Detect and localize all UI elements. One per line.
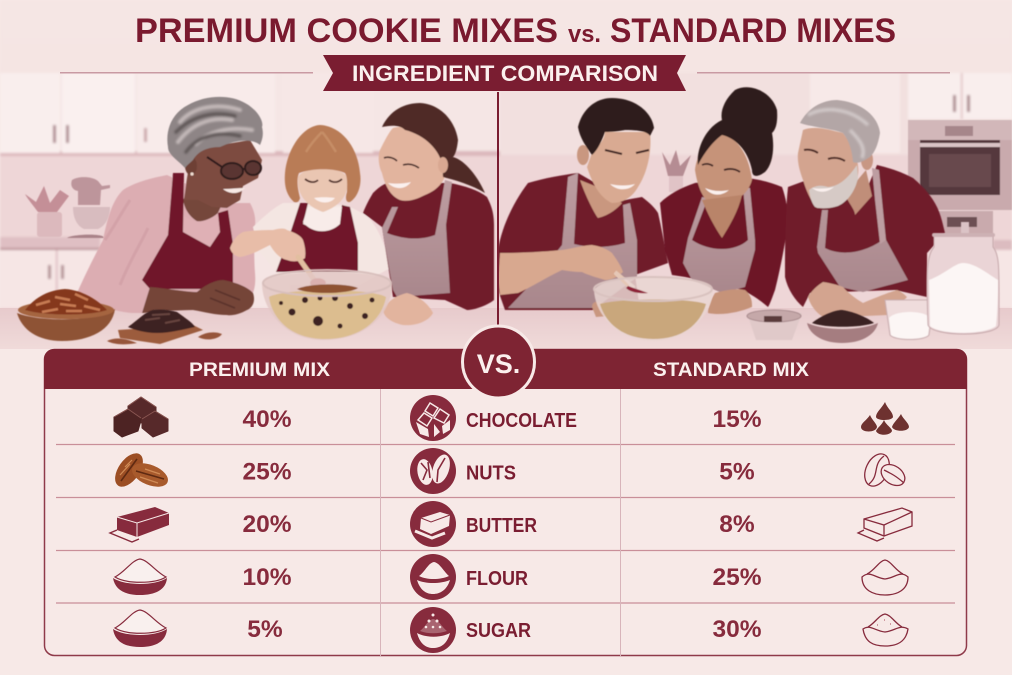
chocolate board: [107, 310, 222, 344]
title: vs.: [568, 21, 601, 48]
premium percentages: 10%: [242, 564, 292, 591]
counter ingredients: [17, 222, 999, 344]
decorative rule left: [60, 72, 313, 74]
premium percentages: 40%: [242, 406, 292, 433]
ingredient labels: NUTS: [466, 462, 516, 484]
icon: standard flour outline: [862, 560, 908, 595]
centre divider: [497, 92, 499, 332]
young man: [498, 98, 668, 317]
oven: [908, 120, 1012, 240]
premium percentages: 5%: [247, 616, 283, 643]
header: premium mix: PREMIUM MIX: [189, 359, 330, 381]
standard mixing bowl: [594, 273, 713, 341]
standard percentages: 30%: [712, 616, 762, 643]
page background below photo: [0, 349, 1012, 675]
icon: centre chocolate badge: [410, 395, 456, 441]
vs badge: [462, 326, 534, 398]
flour jar: [927, 222, 999, 334]
standard percentages: 5%: [719, 458, 755, 486]
grandmother: [77, 97, 263, 315]
stand mixer: [67, 177, 110, 238]
icon: premium flour bowl: [113, 559, 167, 595]
child: [230, 125, 390, 288]
ribbon: ingredient comparison: INGREDIENT COMPARISON: [352, 61, 658, 86]
mother: [363, 103, 494, 325]
worktop: [0, 308, 1012, 350]
icon: standard chocolate chips: [861, 402, 909, 435]
title: [135, 12, 896, 50]
icon: premium pecans: [110, 448, 171, 492]
icon: centre sugar badge: [410, 607, 456, 653]
flower vase: [662, 150, 691, 192]
small sugar glass: [885, 300, 934, 340]
premium percentages: 25%: [242, 458, 292, 486]
icon: centre flour badge: [410, 554, 456, 600]
young woman: [660, 87, 788, 314]
premium mixing bowl: [262, 270, 392, 340]
ingredient labels: [466, 410, 577, 642]
standard percentages: 8%: [719, 511, 755, 538]
header: standard mix: STANDARD MIX: [653, 359, 809, 381]
title: PREMIUM COOKIE MIXES: [135, 12, 558, 50]
icon: premium sugar bowl: [113, 610, 167, 647]
vs badge: VS.: [477, 349, 520, 379]
standard percentages: [712, 406, 762, 643]
pecan bowl: [17, 289, 115, 341]
ingredient labels: CHOCOLATE: [466, 410, 577, 432]
people: standard side: [498, 87, 945, 317]
icon: standard butter outline: [858, 508, 912, 541]
countertop items in background: [25, 150, 691, 238]
ingredient labels: BUTTER: [466, 515, 537, 537]
standard percentages: 25%: [712, 564, 762, 591]
decorative rule right: [697, 72, 950, 74]
metal bowl: [747, 310, 802, 340]
icon: premium chocolate chunks: [114, 397, 168, 437]
chocolate chip bowl: [807, 310, 878, 343]
title: STANDARD MIXES: [610, 12, 896, 50]
ingredient labels: SUGAR: [466, 620, 531, 642]
standard percentages: 15%: [712, 406, 762, 433]
ingredient labels: FLOUR: [466, 568, 528, 590]
premium percentages: [242, 406, 292, 643]
icon: standard sugar outline: [863, 614, 908, 646]
ribbon: ingredient comparison: [323, 55, 686, 91]
icon: standard nuts outline: [860, 450, 909, 490]
icon: centre nuts badge: [410, 448, 456, 494]
people: premium side: [77, 97, 494, 325]
utensil crock: [25, 186, 69, 237]
comparison table: [44, 349, 967, 656]
icon: premium butter: [110, 507, 169, 542]
premium percentages: 20%: [242, 511, 292, 538]
icon: centre butter badge: [410, 501, 456, 547]
kitchen background: [0, 0, 1012, 350]
older man: [785, 100, 945, 317]
